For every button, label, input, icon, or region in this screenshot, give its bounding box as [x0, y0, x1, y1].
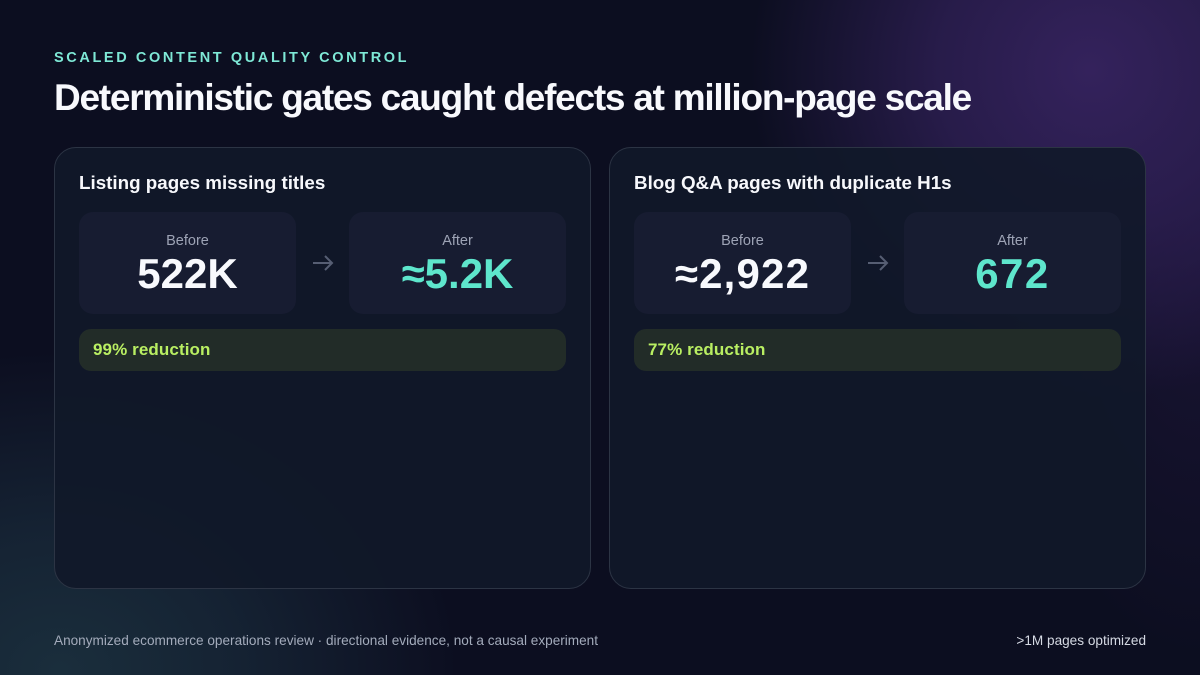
reduction callout: 99% reduction — [93, 340, 210, 359]
after metric — [349, 212, 566, 314]
arrow — [313, 255, 334, 271]
footer scale note: >1M pages optimized — [1016, 633, 1146, 648]
panel heading: Blog Q&A pages with duplicate H1s — [634, 172, 952, 193]
footer source note: Anonymized ecommerce operations review · directional evidence, not a causal experiment — [54, 633, 598, 648]
panel heading: Listing pages missing titles — [79, 172, 325, 193]
before metric — [634, 212, 851, 314]
before metric: Before — [721, 233, 764, 249]
reduction callout: 77% reduction — [648, 340, 766, 359]
after metric: ≈5.2K — [402, 250, 513, 297]
panel: listing pages — [54, 147, 591, 589]
title: Deterministic gates caught defects at million-page scale — [54, 77, 971, 118]
reduction callout — [79, 329, 566, 371]
before metric: ≈2,922 — [675, 250, 810, 297]
before metric: Before — [166, 233, 209, 249]
after metric: 672 — [975, 250, 1050, 297]
before metric — [79, 212, 296, 314]
eyebrow label: SCALED CONTENT QUALITY CONTROL — [54, 50, 409, 66]
after metric: After — [997, 233, 1028, 249]
panel: blog Q&A pages — [609, 147, 1146, 589]
after metric: After — [442, 233, 473, 249]
arrow — [868, 255, 888, 271]
reduction callout — [634, 329, 1121, 371]
after metric — [904, 212, 1121, 314]
before metric: 522K — [137, 250, 238, 297]
